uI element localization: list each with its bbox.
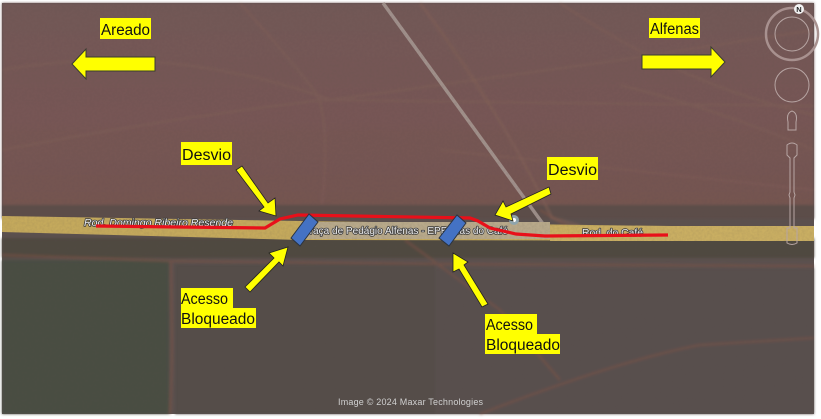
label: Acesso Bloqueado left — [181, 288, 256, 328]
look joystick — [775, 17, 809, 51]
light access road crossing field — [383, 3, 546, 228]
label: Acesso Bloqueado right: Bloqueado — [486, 337, 560, 354]
label: Desvio right — [547, 157, 598, 180]
map navigation controls — [766, 8, 818, 244]
blocked access block: left — [291, 214, 318, 246]
street view figure — [788, 111, 796, 130]
label: Desvio left: Desvio — [182, 147, 231, 164]
tree line below the road — [2, 238, 814, 258]
map attribution: Image © 2024 Maxar Technologies — [338, 397, 484, 407]
label: Areado: Areado — [101, 22, 150, 39]
red detour route — [96, 215, 668, 236]
arrow: Acesso Bloqueado right pointing up-left — [453, 253, 488, 307]
compass ring — [766, 8, 818, 60]
label: Acesso Bloqueado left: Bloqueado — [181, 311, 255, 328]
arrow: Areado left — [72, 49, 155, 79]
arrow: Alfenas right — [642, 47, 725, 77]
blocked access block: right — [439, 215, 466, 246]
tree line above the road — [2, 205, 814, 219]
zoom slider — [787, 143, 797, 244]
label: Acesso Bloqueado right — [485, 314, 560, 354]
field: upper farmland — [2, 3, 814, 207]
road label: Rod. Domingo Ribeiro Resende: Rod. Domingo Ribeiro Resende — [84, 218, 233, 229]
label: Desvio right: Desvio — [548, 162, 597, 179]
arrow: Desvio left pointing down-right — [236, 166, 276, 216]
field: lower right plantation — [435, 268, 814, 414]
dirt tracks — [2, 210, 814, 414]
label: Alfenas: Alfenas — [650, 21, 699, 38]
compass north badge: N — [796, 5, 802, 14]
field: lower left green plantation — [2, 260, 169, 414]
label: Acesso Bloqueado left: Acesso — [181, 291, 228, 308]
label: Desvio left — [181, 142, 232, 165]
move joystick — [775, 68, 809, 102]
arrow: Desvio right pointing down-left — [495, 187, 551, 221]
arrow: Acesso Bloqueado left pointing up-right — [245, 247, 288, 292]
road label: Rod. do Café: Rod. do Café — [582, 228, 643, 239]
road label: Praça de Pedágio: Praça de Pedágio Alfenas - EPR Vias do Café — [303, 226, 508, 237]
compass north badge — [794, 4, 804, 14]
field: lower centre plantation — [175, 264, 435, 414]
highway — [2, 216, 814, 241]
label: Acesso Bloqueado right: Acesso — [486, 317, 533, 334]
map pin icon — [509, 215, 519, 225]
